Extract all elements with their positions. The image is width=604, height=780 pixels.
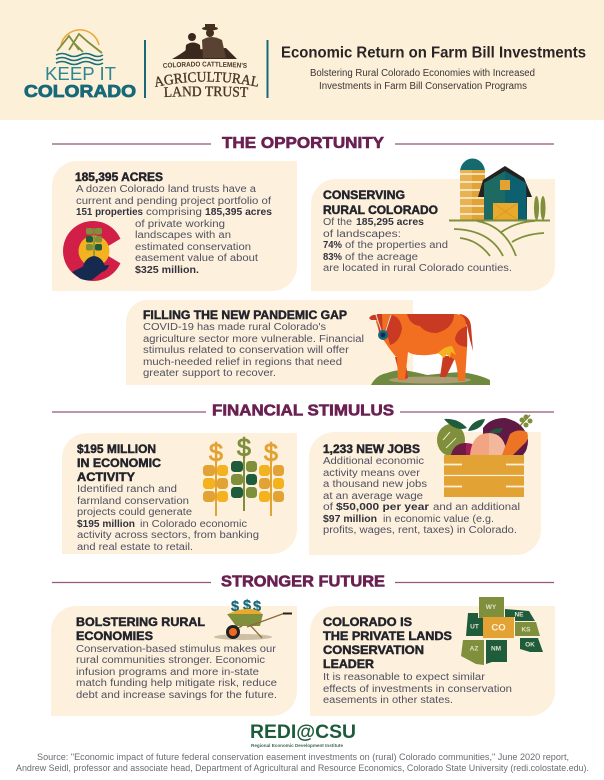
logo: Colorado Cattlemen's Agricultural Land Trust: AGRICULTURAL	[154, 72, 258, 88]
heading: bolstering rural economies: ECONOMIES	[76, 631, 153, 643]
logo: REDI@CSU: REDI@CSU	[250, 721, 356, 743]
heading: $195 million in economic activity: ACTIVITY	[77, 472, 135, 484]
logo: REDI@CSU: Regional Economic Development Institute	[251, 743, 344, 748]
body text: current and pending project portfolio of	[76, 196, 271, 207]
body text: A dozen Colorado land trusts have a	[76, 184, 256, 195]
body text: of the properties and	[345, 240, 448, 251]
subtitle: Investments in Farm Bill Conservation Programs	[319, 81, 527, 92]
body text: of	[323, 502, 333, 513]
body text: are located in rural Colorado counties.	[323, 263, 512, 274]
logo: Keep It Colorado: KEEP IT	[45, 64, 116, 84]
body text: and real estate to retail.	[77, 542, 193, 553]
heading: $195 million in economic activity: IN ECONOMIC	[77, 458, 161, 470]
heading: 185,395 acres: 185,395 ACRES	[75, 172, 163, 184]
map: Colorado and neighbouring states: WY	[486, 604, 497, 611]
body text	[76, 644, 277, 701]
logo: Keep It Colorado: COLORADO	[24, 81, 136, 101]
icon: wheelbarrow of money: $	[231, 599, 239, 615]
body text: activity across sectors, from banking	[77, 530, 259, 541]
icon: wheelbarrow of money: $	[253, 599, 261, 615]
body text: of private working	[135, 219, 225, 230]
body text: much-needed relief in regions that need	[143, 357, 342, 368]
body text: 151 properties	[76, 207, 143, 218]
icon: wheat stalks with dollar signs	[203, 434, 284, 516]
icon: wheelbarrow of money	[214, 598, 292, 640]
header band	[0, 0, 604, 120]
body text: Of the	[323, 217, 352, 228]
body text: 74%	[323, 240, 342, 251]
source note: Andrew Seidl, professor and associate head, Department of Agricultural and Resource Economics, Colorado State University (redi.colostate.edu).	[16, 763, 589, 773]
body text: of landscapes:	[323, 229, 401, 240]
icon: Colorado C with plant in hand	[63, 221, 125, 281]
heading: Colorado is the private lands conservation leader	[323, 617, 452, 671]
heading: Colorado is the private lands conservation leader: COLORADO IS	[323, 617, 412, 629]
icon: barn, silo and fields	[449, 158, 550, 256]
heading: conserving rural Colorado: CONSERVING	[323, 190, 405, 202]
panel: Colorado is the private lands conservation leader	[310, 597, 555, 716]
title: Economic Return on Farm Bill Investments	[281, 44, 586, 62]
map: Colorado and neighbouring states: KS	[521, 626, 531, 634]
heading: Colorado is the private lands conservation leader: THE PRIVATE LANDS	[323, 631, 452, 643]
body text: 185,395 acres	[205, 207, 272, 218]
logo: Colorado Cattlemen's Agricultural Land Trust	[154, 24, 258, 98]
body text: match funding help mitigate risk, reduce	[76, 678, 277, 689]
heading: Financial Stimulus: FINANCIAL STIMULUS	[212, 402, 394, 420]
icon: cow on grass	[369, 314, 490, 385]
icon: wheelbarrow of money: $	[243, 598, 251, 614]
body text	[143, 322, 364, 379]
body text: $97 million	[323, 514, 377, 525]
icon: crate of vegetables	[437, 414, 532, 497]
body text: infusion programs and more in-state	[76, 667, 260, 678]
body text: COVID-19 has made rural Colorado's	[143, 322, 326, 333]
panel: bolstering rural economies	[51, 598, 297, 716]
body text: in economic value (e.g.	[383, 514, 494, 525]
body text: comprising	[146, 207, 202, 218]
source note	[16, 752, 589, 773]
map: Colorado and neighbouring states: UT	[470, 624, 479, 630]
heading: conserving rural Colorado: RURAL COLORADO	[323, 205, 438, 217]
map: Colorado and neighbouring states: CO	[491, 622, 506, 634]
heading: conserving rural Colorado	[323, 190, 438, 217]
heading: bolstering rural economies	[76, 617, 205, 643]
map: Colorado and neighbouring states: NE	[514, 612, 524, 618]
subtitle: Bolstering Rural Colorado Economies with Increased	[310, 68, 535, 79]
body text: $50,000 per year	[336, 502, 429, 513]
logo: Keep It Colorado	[24, 30, 136, 101]
body text: activity means over	[323, 468, 421, 479]
subtitle	[310, 68, 535, 92]
body text: stimulus related to conservation will offer	[143, 345, 350, 356]
body text: landscapes with an	[135, 230, 231, 241]
body text	[76, 184, 272, 276]
panel: conserving rural Colorado	[311, 158, 555, 291]
body text: $325 million.	[135, 265, 199, 276]
map: Colorado and neighbouring states: AZ	[470, 646, 478, 652]
body text: of the acreage	[345, 252, 418, 263]
map: Colorado and neighbouring states	[461, 597, 543, 665]
logo: Colorado Cattlemen's Agricultural Land Trust: LAND TRUST	[164, 86, 248, 98]
body text	[77, 484, 259, 553]
heading: $195 million in economic activity	[77, 444, 161, 484]
heading: Stronger Future: STRONGER FUTURE	[221, 574, 385, 590]
body text: in Colorado economic	[140, 519, 247, 530]
panel: 185,395 acres	[52, 161, 297, 291]
body text: effects of investments in conservation	[323, 684, 512, 695]
map: Colorado and neighbouring states: OK	[525, 642, 535, 648]
panel: filling the new pandemic gap	[126, 300, 490, 385]
body text: It is reasonable to expect similar	[323, 672, 486, 683]
map: Colorado and neighbouring states: NM	[491, 646, 501, 652]
body text: Identified ranch and	[77, 484, 177, 495]
body text: at an average wage	[323, 491, 423, 502]
body text: 83%	[323, 252, 342, 263]
body text: 185,295 acres	[356, 217, 424, 228]
body text: rural communities stronger. Economic	[76, 655, 265, 666]
body text: profits, wages, rent, taxes) in Colorado.	[323, 525, 517, 536]
icon: wheat stalks with dollar signs: $	[264, 439, 278, 467]
body text	[323, 456, 520, 536]
heading: filling the new pandemic gap: FILLING THE NEW PANDEMIC GAP	[143, 310, 347, 322]
body text: Additional economic	[323, 456, 424, 467]
icon: wheat stalks with dollar signs: $	[237, 434, 251, 462]
heading: Colorado is the private lands conservation leader: CONSERVATION	[323, 645, 424, 657]
body text: easement value of about	[135, 253, 258, 264]
heading: bolstering rural economies: BOLSTERING RURAL	[76, 617, 205, 629]
body text: Conservation-based stimulus makes our	[76, 644, 277, 655]
body text	[323, 217, 512, 274]
heading: Colorado is the private lands conservation leader: LEADER	[323, 659, 375, 671]
body text: agriculture sector more vulnerable. Financial	[143, 334, 364, 345]
source note: Source: "Economic impact of future federal conservation easement investments on (rural) Colorado communities," June 2020 report,	[37, 752, 569, 762]
body text: estimated conservation	[135, 242, 251, 253]
heading: The Opportunity: THE OPPORTUNITY	[222, 135, 385, 152]
heading: 1,233 new jobs: 1,233 NEW JOBS	[323, 444, 420, 456]
icon: wheat stalks with dollar signs: $	[209, 439, 223, 467]
heading: $195 million in economic activity: $195 MILLION	[77, 444, 156, 456]
body text: a thousand new jobs	[323, 479, 427, 490]
body text: $195 million	[77, 519, 135, 530]
body text: projects could generate	[77, 507, 192, 518]
body text: and an additional	[433, 502, 520, 513]
body text: easements in other states.	[323, 695, 453, 706]
body text: greater support to recover.	[143, 368, 276, 379]
panel: 1,233 new jobs	[309, 414, 541, 555]
body text: farmland conservation	[77, 496, 189, 507]
panel: $195 million	[62, 433, 297, 554]
body text	[323, 672, 512, 706]
logo: Colorado Cattlemen's Agricultural Land Trust: COLORADO CATTLEMEN'S	[163, 62, 247, 68]
body text: debt and increase savings for the future.	[76, 690, 277, 701]
